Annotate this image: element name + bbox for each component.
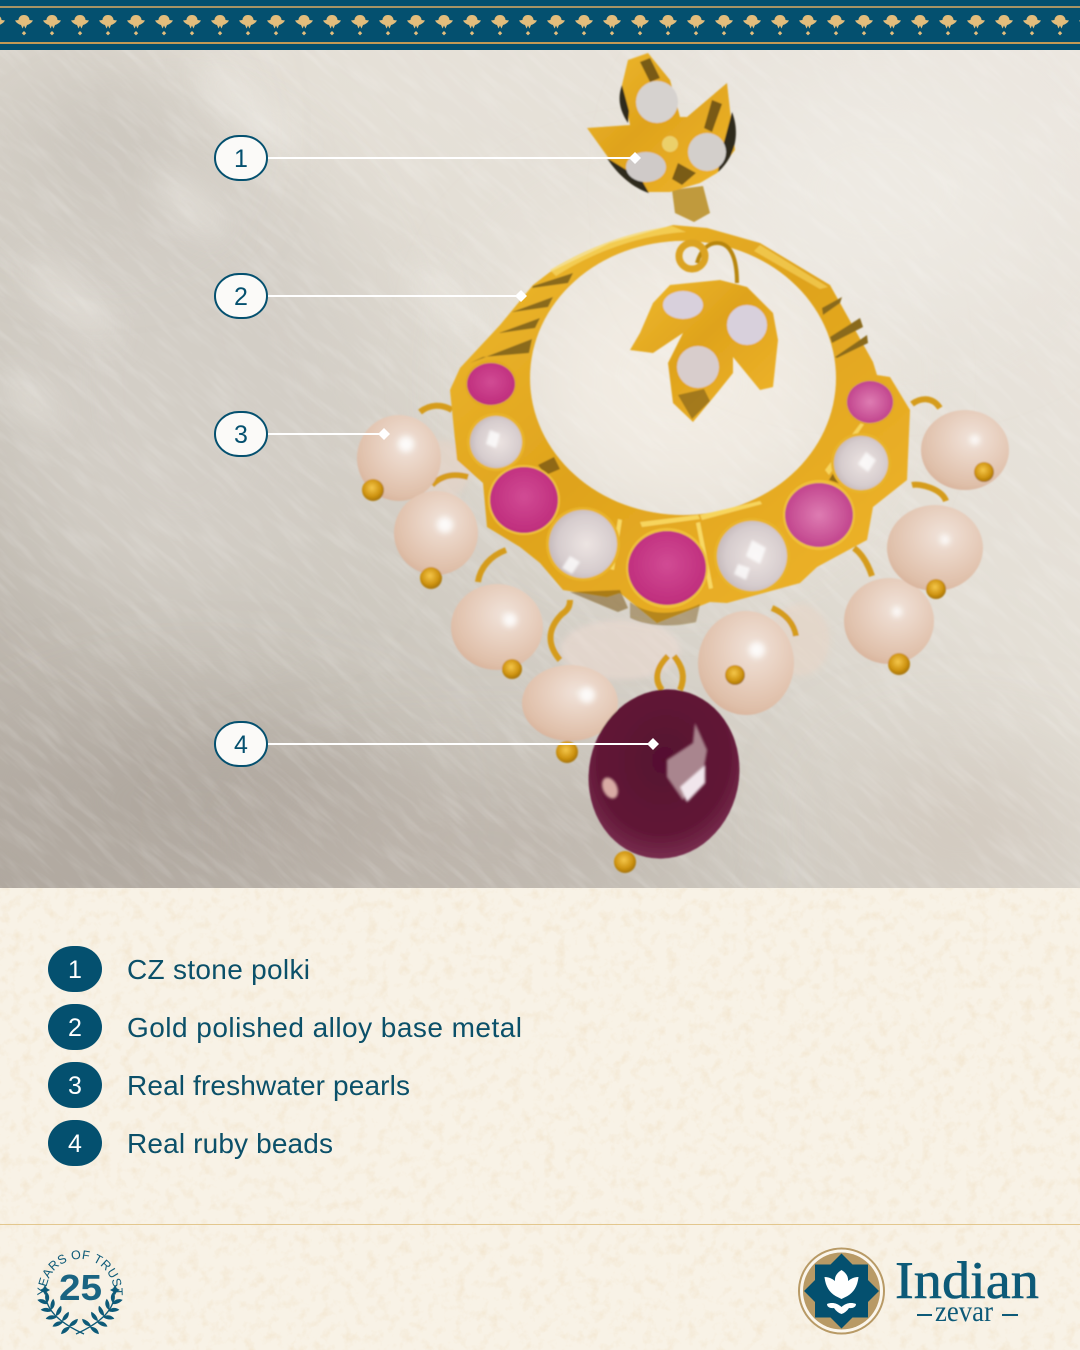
legend item 4: Real ruby beads — [127, 1128, 333, 1159]
CZ stones — [467, 413, 891, 594]
earring photo illustration — [357, 53, 1009, 873]
footer divider — [0, 1224, 1080, 1225]
badge: 25 years of trust: 25 — [59, 1267, 102, 1308]
legend item 3: 3 — [68, 1072, 82, 1100]
legend item 3: Real freshwater pearls — [127, 1070, 410, 1101]
legend — [48, 946, 522, 1166]
photo background: white fur — [0, 50, 1080, 888]
gold crescent — [450, 225, 910, 623]
callout 4: 4 — [234, 731, 248, 759]
callout 1 — [215, 136, 641, 180]
pearls — [357, 410, 1009, 741]
callout 4 — [215, 722, 659, 766]
pendant leaves — [630, 243, 778, 422]
top decorative band — [0, 0, 1080, 50]
gold ring stripes and facets — [470, 226, 868, 625]
legend item 4 — [48, 1120, 333, 1166]
logo: Indian Zevar — [799, 1248, 1039, 1334]
legend item 1 — [48, 946, 310, 992]
callout 3: 3 — [234, 421, 248, 449]
callout 2 — [215, 274, 527, 318]
laurel — [37, 1292, 123, 1334]
logo: Indian Zevar: zevar — [935, 1295, 993, 1328]
callout 2: 2 — [234, 283, 248, 311]
legend item 2 — [48, 1004, 522, 1050]
legend item 3 — [48, 1062, 410, 1108]
callout 1: 1 — [234, 145, 248, 173]
badge: 25 years of trust — [37, 1250, 123, 1335]
ruby drop bead — [573, 675, 755, 873]
gold beads — [362, 462, 994, 873]
top flower — [587, 53, 736, 222]
legend item 2: 2 — [68, 1014, 82, 1042]
legend item 1: CZ stone polki — [127, 954, 310, 985]
logo wordmark: Indian — [895, 1252, 1039, 1310]
legend item 2: Gold polished alloy base metal — [127, 1012, 522, 1043]
ruby stones — [465, 360, 895, 608]
badge: 25 years of trust: YEARS OF TRUST — [37, 1250, 123, 1296]
legend item 1: 1 — [68, 956, 82, 984]
logo emblem — [799, 1248, 884, 1334]
legend item 4: 4 — [68, 1130, 82, 1158]
pearl reflections — [410, 440, 830, 680]
callout 3 — [215, 412, 390, 456]
page background: cream paper — [0, 888, 1080, 1350]
pendant chains — [420, 399, 946, 690]
